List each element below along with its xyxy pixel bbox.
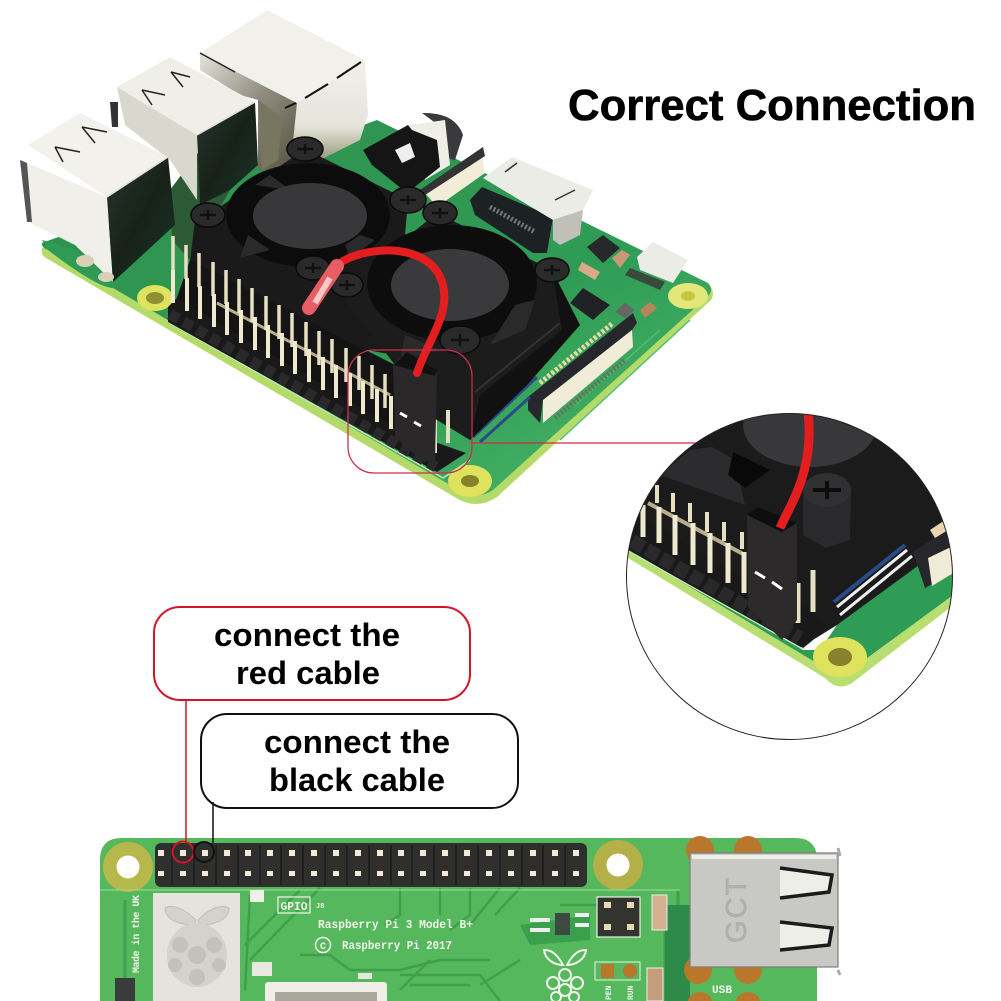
- zoom connector housing: [747, 507, 797, 640]
- zoom ribbon stripes: [837, 550, 912, 615]
- GPIO header: [168, 236, 466, 472]
- PEN and RUN pads: [595, 962, 640, 1000]
- USB silkscreen label: USB: [712, 985, 732, 997]
- zoom header housing: [802, 628, 826, 648]
- front row pins: [173, 270, 391, 429]
- zoom circle detail: [626, 413, 953, 740]
- red highlight box: [348, 350, 472, 473]
- left mounting hole: [103, 842, 153, 892]
- back row pins: [173, 236, 385, 408]
- USB port lower: [20, 113, 175, 288]
- silkscreen labels: Raspberry Pi 3 Model B+: [318, 918, 473, 932]
- USB port: GCT: [721, 876, 753, 943]
- callout: red cable: red cable: [236, 655, 380, 691]
- red leader line: [185, 700, 187, 842]
- red fan cable: [309, 250, 444, 373]
- right mounting hole: [593, 840, 643, 890]
- wireless chip: [265, 982, 387, 1001]
- zoom screw post: [803, 490, 851, 548]
- HDMI port: [470, 157, 593, 253]
- leader line to zoom circle: [471, 442, 696, 444]
- USB port: [690, 848, 840, 975]
- PEN and RUN pads: PEN: [605, 985, 614, 1000]
- chips: [570, 235, 657, 320]
- ribbon stripes: [473, 377, 537, 442]
- fan screws: [191, 137, 569, 354]
- zoom back pins: [657, 485, 742, 549]
- J-header component: [115, 978, 135, 1001]
- GPIO header: [155, 843, 587, 887]
- callout: red cable: [154, 607, 470, 700]
- black pin marker: [194, 842, 214, 862]
- callout: red cable: connect the: [214, 617, 400, 653]
- end pins: [435, 410, 448, 453]
- main photo: Raspberry Pi with dual fans: [20, 10, 713, 504]
- small components: [250, 890, 667, 1001]
- callout: black cable: connect the: [264, 724, 450, 760]
- red pin marker: [172, 842, 194, 862]
- silkscreen labels: Made in the UK: [131, 895, 143, 973]
- title: Correct Connection: [568, 82, 976, 130]
- zoom board: [620, 545, 960, 687]
- callout: black cable: black cable: [269, 762, 445, 798]
- raspberry outline logo: [544, 950, 586, 1001]
- ethernet port: [200, 10, 368, 170]
- display ribbon connector: [528, 313, 637, 423]
- callout: black cable: [201, 714, 518, 808]
- mounting holes: [137, 283, 708, 497]
- black leader line: [212, 802, 214, 843]
- micro USB port: [625, 242, 688, 290]
- front fan: [345, 213, 580, 440]
- zoom fan and heatsink: [629, 420, 942, 648]
- traces: [125, 888, 678, 1001]
- silkscreen labels: [131, 895, 473, 973]
- darker green areas: [665, 905, 690, 1001]
- jumper connector housing: [393, 350, 437, 462]
- zoom front pins: [643, 505, 744, 593]
- board: [100, 838, 817, 1001]
- silkscreen labels: GPIO: [280, 900, 308, 914]
- zoom right pins: [798, 570, 813, 623]
- USB port upper: [110, 57, 282, 205]
- silkscreen labels: C: [320, 942, 326, 953]
- jumper header: [597, 897, 640, 937]
- silkscreen labels: J8: [316, 903, 324, 911]
- crossbar: [217, 303, 390, 395]
- zoom circle outline: [626, 414, 952, 740]
- PEN and RUN pads: RUN: [627, 985, 636, 1000]
- USB solder pads: [684, 836, 762, 1001]
- zoom red cable: [780, 412, 809, 528]
- zoom crossbar: [648, 503, 745, 555]
- bottom photo: top view of board: [100, 836, 840, 1001]
- circuit board: [42, 120, 713, 504]
- Raspberry logo shield: [153, 893, 240, 1001]
- zoom mounting hole: [813, 637, 867, 677]
- back fan: [190, 149, 408, 355]
- silkscreen labels: Raspberry Pi 2017: [342, 939, 452, 953]
- zoom ribbon connector: [913, 532, 950, 588]
- audio jack and camera connector: [363, 113, 485, 207]
